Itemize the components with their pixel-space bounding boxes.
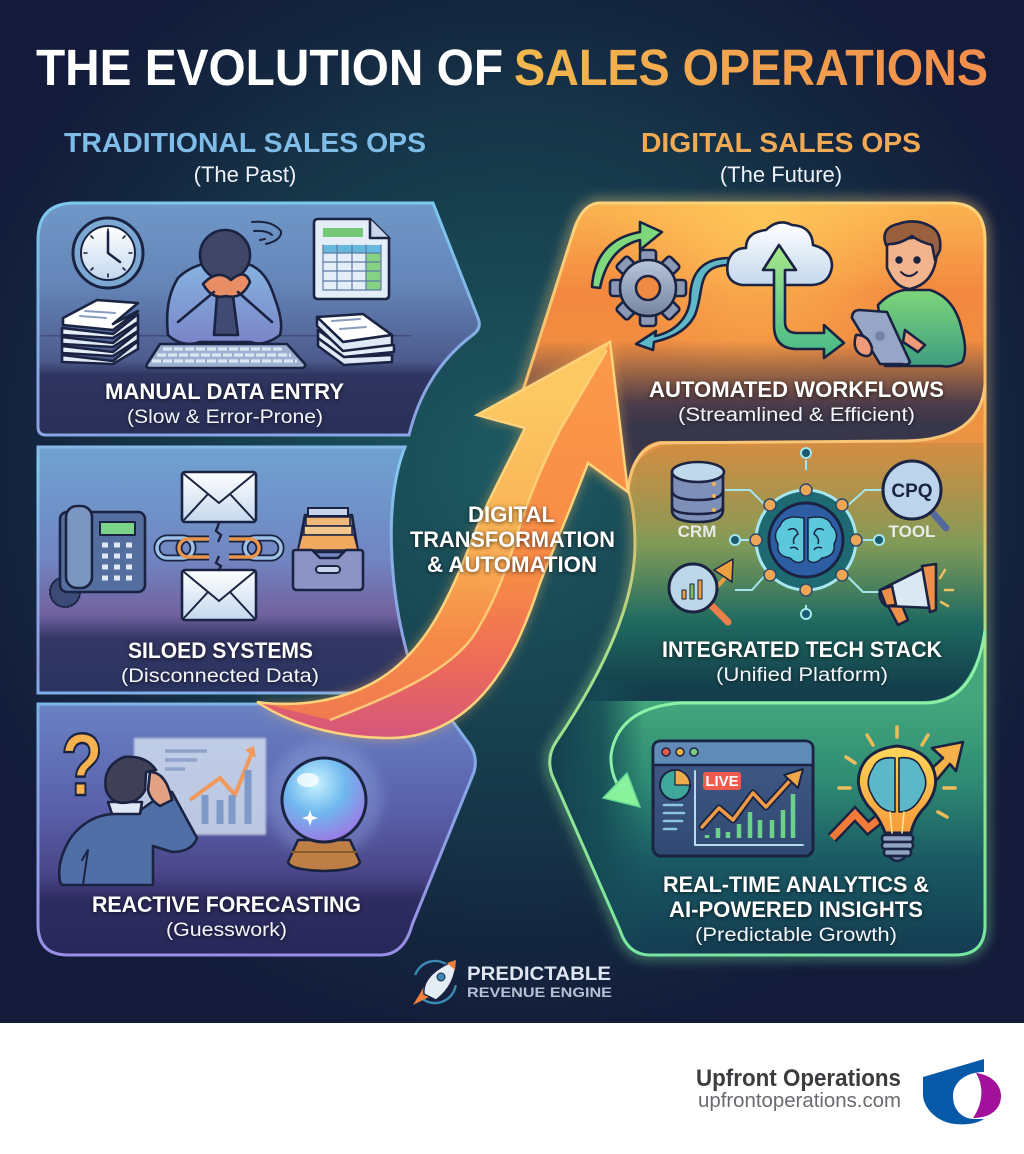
icon: puzzled man bbox=[59, 757, 197, 885]
left fade of lower panel bbox=[551, 686, 640, 886]
label: automated workflows: (Streamlined & Efficient) bbox=[678, 405, 915, 426]
icon: gear with cycle arrows bbox=[592, 222, 686, 326]
label: real-time analytics bbox=[663, 872, 929, 946]
panel borders bbox=[520, 203, 985, 955]
heading: traditional sales ops: TRADITIONAL SALES OPS bbox=[64, 127, 426, 158]
heading: traditional sales ops bbox=[64, 127, 426, 187]
label: crm: CRM bbox=[678, 522, 716, 541]
icon: wall clock bbox=[73, 218, 143, 288]
label: automated workflows: AUTOMATED WORKFLOWS bbox=[649, 377, 944, 402]
footer brand text: upfrontoperations.com bbox=[698, 1090, 901, 1112]
label: siloed systems: (Disconnected Data) bbox=[121, 666, 319, 687]
title bbox=[36, 39, 988, 96]
icon: chart magnifier bbox=[669, 559, 733, 622]
icon: left paper stack bbox=[62, 300, 138, 364]
footer brand text: Upfront Operations bbox=[696, 1065, 901, 1092]
label: tool: TOOL bbox=[889, 522, 935, 541]
label: manual data entry bbox=[105, 379, 344, 428]
panel: automated workflows content bbox=[592, 221, 965, 426]
footer logo mark bbox=[923, 1059, 1001, 1124]
icon: blurred chart board bbox=[134, 738, 266, 835]
arrow: green return arrow head bbox=[603, 773, 640, 807]
panel: integrated tech stack content bbox=[662, 448, 953, 686]
label: real-time analytics: AI-POWERED INSIGHTS bbox=[669, 897, 923, 922]
icon: desk phone bbox=[50, 506, 145, 607]
footer band bbox=[0, 1023, 1024, 1154]
icon: man with tablet bbox=[852, 221, 965, 366]
panel: reactive forecasting bbox=[38, 704, 475, 955]
heading: digital sales ops: DIGITAL SALES OPS bbox=[641, 127, 921, 158]
icon: bottom envelope bbox=[182, 570, 256, 620]
label: digital transformation & automation bbox=[410, 502, 615, 577]
label: real-time analytics: REAL-TIME ANALYTICS & bbox=[663, 872, 929, 897]
arrow: blue link from cloud bbox=[636, 258, 730, 350]
logo: predictable revenue engine: REVENUE ENGINE bbox=[467, 984, 612, 1000]
icon: question mark: ? bbox=[61, 715, 103, 814]
label: manual data entry: MANUAL DATA ENTRY bbox=[105, 379, 344, 404]
label: integrated tech stack bbox=[662, 637, 942, 686]
label: siloed systems: SILOED SYSTEMS bbox=[128, 638, 313, 663]
icon: stressed worker at desk bbox=[167, 222, 281, 344]
label: digital transformation & automation: & AUTOMATION bbox=[427, 552, 597, 577]
icon: database bbox=[672, 462, 724, 522]
label: integrated tech stack: (Unified Platform) bbox=[716, 665, 888, 686]
title: SALES OPERATIONS bbox=[514, 39, 988, 96]
panel: siloed systems bbox=[38, 447, 420, 693]
label: integrated tech stack: INTEGRATED TECH STACK bbox=[662, 637, 942, 662]
outer glow bbox=[520, 203, 985, 955]
icon: live dashboard: LIVE bbox=[705, 773, 739, 790]
label: manual data entry: (Slow & Error-Prone) bbox=[127, 407, 323, 428]
arrow: digital transformation swoosh bbox=[257, 342, 628, 738]
logo: predictable revenue engine bbox=[406, 953, 612, 1011]
label: real-time analytics: (Predictable Growth) bbox=[695, 925, 897, 946]
icon: live dashboard bbox=[653, 741, 813, 856]
icon: cloud bbox=[727, 222, 832, 285]
label: reactive forecasting: REACTIVE FORECASTING bbox=[92, 892, 361, 917]
icon: megaphone bbox=[880, 564, 953, 625]
heading: digital sales ops bbox=[641, 127, 921, 187]
panel: automated workflows fill bbox=[526, 343, 984, 481]
arrow: green branching arrow bbox=[763, 245, 844, 358]
label: digital transformation & automation: TRANSFORMATION bbox=[410, 527, 615, 552]
icon: keyboard bbox=[146, 344, 305, 368]
icon: top envelope bbox=[182, 472, 256, 522]
icon: central brain hub bbox=[750, 484, 862, 596]
icon: rocket bbox=[406, 953, 464, 1011]
icon: cpq magnifier bbox=[883, 461, 946, 528]
panel: integrated tech stack fill bbox=[584, 443, 984, 701]
panel: real-time analytics content bbox=[653, 727, 963, 946]
panel: manual data entry bbox=[38, 203, 479, 435]
label: reactive forecasting bbox=[92, 892, 361, 941]
label: automated workflows bbox=[649, 377, 944, 426]
label: digital transformation & automation: DIGITAL bbox=[468, 502, 555, 527]
icon: broken chain bbox=[157, 523, 281, 571]
icon: file drawer bbox=[293, 508, 363, 590]
icon: spreadsheet bbox=[314, 219, 389, 299]
heading: digital sales ops: (The Future) bbox=[720, 162, 842, 187]
panel: real-time analytics fill bbox=[588, 647, 984, 954]
title: THE EVOLUTION OF bbox=[36, 39, 503, 96]
icon: brain light bulb bbox=[832, 727, 963, 861]
hub connector lines bbox=[725, 448, 890, 619]
icon: cpq magnifier: CPQ bbox=[891, 481, 933, 502]
panel base gradient bbox=[500, 200, 1000, 960]
logo: predictable revenue engine: PREDICTABLE bbox=[467, 964, 611, 985]
icon: right paper stack bbox=[317, 314, 394, 365]
heading: traditional sales ops: (The Past) bbox=[194, 162, 296, 187]
panel group: digital sales ops bbox=[500, 200, 1000, 960]
footer brand text bbox=[696, 1065, 901, 1112]
icon: crystal ball bbox=[266, 742, 382, 871]
label: reactive forecasting: (Guesswork) bbox=[166, 920, 287, 941]
label: siloed systems bbox=[121, 638, 319, 687]
